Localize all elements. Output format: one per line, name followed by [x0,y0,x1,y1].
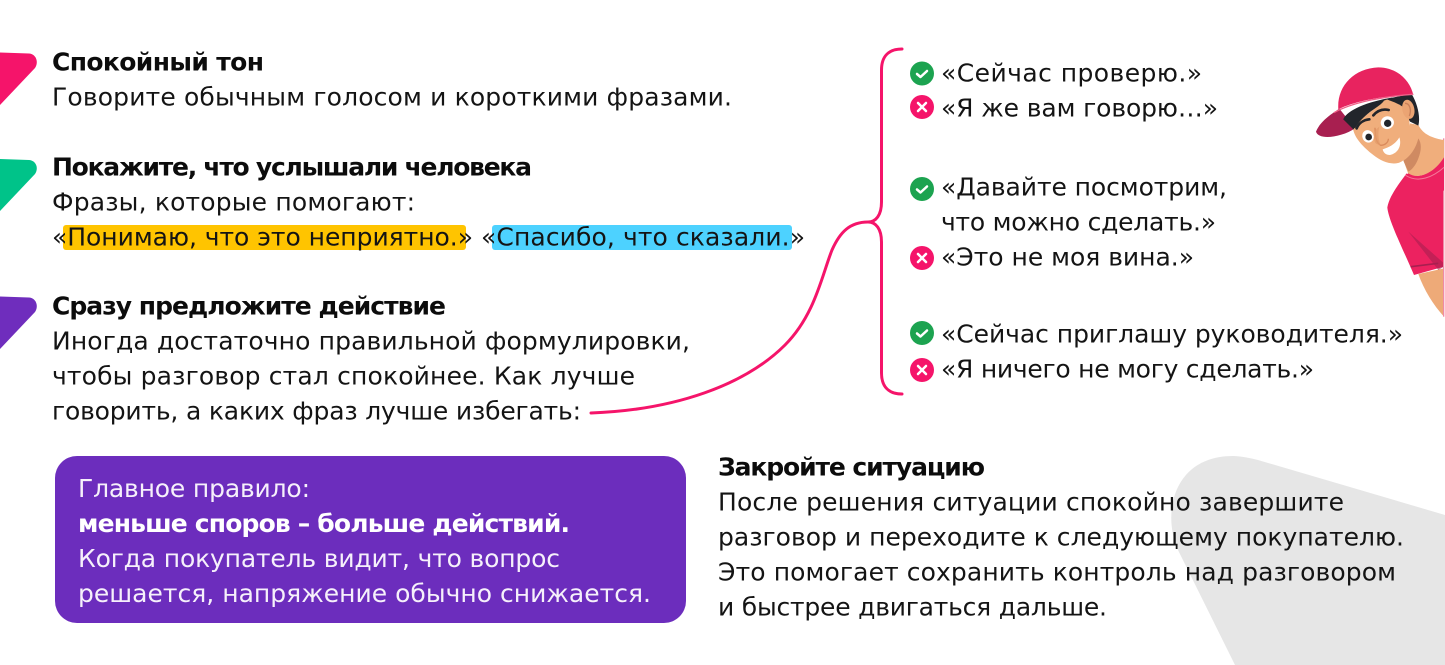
icon: check 1 [910,62,934,86]
text: good phrase 3: «Сейчас приглашу руководителя.» [941,320,1403,348]
block: show you heard [52,152,805,252]
marker: green triangle [0,159,37,211]
block: calm tone [52,48,732,112]
list: good and bad phrases: что можно сделать.» [941,208,1216,236]
heading: close the situation: Закройте ситуацию [718,452,985,482]
text: offer action line 3: говорить, а каких фраз лучше избегать: [52,396,581,426]
text: good phrase 1: «Сейчас проверю.» [941,58,1202,88]
block: offer action [52,292,690,426]
text: main rule line 2: меньше споров – больше действий. [78,509,570,538]
text: offer action line 2: чтобы разговор стал спокойнее. Как лучше [52,362,635,390]
text: bad phrase 1: «Я же вам говорю…» [941,94,1218,122]
text: phrase one: «Понимаю, что это неприятно.» [52,222,473,252]
text: offer action line 1: Иногда достаточно правильной формулировки, [52,326,690,356]
text: phrase two: «Спасибо, что сказали.» [481,222,805,252]
connector: curve and bracket [591,49,902,413]
text: bad phrase 2: «Это не моя вина.» [941,242,1194,272]
icon: check 2 [910,177,934,201]
text: main rule line 4: решается, напряжение обычно снижается. [78,579,651,608]
heading: offer action: Сразу предложите действие [52,292,446,320]
highlight: blue phrase [492,225,792,250]
heading: calm tone: Спокойный тон [52,48,264,76]
text: main rule line 3: Когда покупатель видит, что вопрос [78,544,560,573]
text: calm tone body: Говорите обычным голосом и короткими фразами. [52,82,732,112]
text: helpful phrases intro: Фразы, которые помогают: [52,188,415,216]
text: close line 2: разговор и переходите к следующему покупателю. [718,522,1404,552]
heading: show you heard: Покажите, что услышали человека [52,152,532,182]
illustration: boy in cap [1316,67,1444,317]
text: good phrase 2: «Давайте посмотрим, [941,172,1227,202]
highlight: yellow phrase [63,225,466,250]
marker: pink triangle [0,52,37,105]
background shape: grey blob [1171,456,1445,665]
icon: cross 2 [910,246,934,270]
text: close line 4: и быстрее двигаться дальше. [718,592,1107,622]
list: good and bad phrases [910,58,1403,384]
icon: check 3 [910,321,934,345]
text: bad phrase 3: «Я ничего не могу сделать.» [941,354,1314,384]
text: main rule line 1: Главное правило: [78,474,310,503]
block: close the situation [718,452,1404,622]
callout background [55,456,686,623]
text: close line 1: После решения ситуации спокойно завершите [718,488,1344,516]
text: close line 3: Это помогает сохранить контроль над разговором [718,558,1396,586]
callout: main rule [55,456,686,623]
icon: cross 1 [910,95,934,119]
icon: cross 3 [910,358,934,382]
marker: purple triangle [0,296,37,349]
